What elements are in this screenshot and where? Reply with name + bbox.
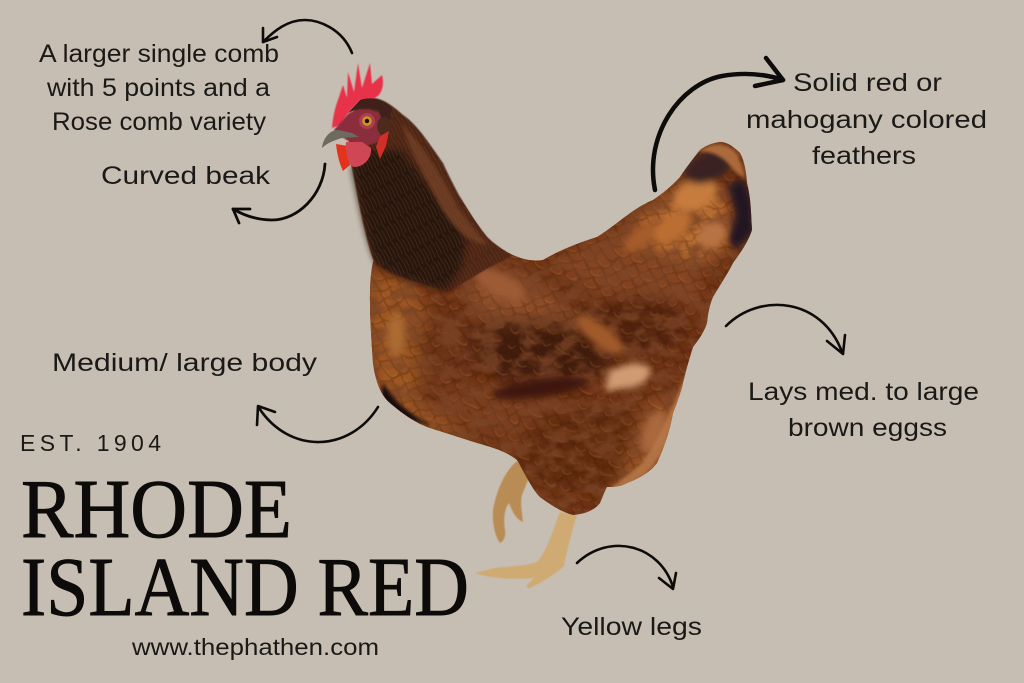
tail orange — [640, 180, 728, 262]
saddle dark — [592, 295, 688, 355]
label: eggs: Lays med. to large — [748, 378, 979, 406]
pink wattle — [346, 142, 371, 167]
dark tail top — [682, 151, 732, 188]
label: beak: Curved beak — [101, 162, 271, 190]
head — [322, 63, 392, 171]
standing leg and foot — [475, 512, 577, 588]
mottled shading — [370, 142, 752, 514]
label: comb: with 5 points and a — [46, 74, 270, 102]
label: feathers: mahogany colored — [746, 106, 987, 134]
belly edge glow — [610, 374, 685, 487]
breast highlight — [370, 269, 466, 436]
raised foot — [493, 461, 530, 543]
label: eggs — [748, 378, 979, 442]
neck hackles — [348, 98, 512, 292]
eye — [362, 116, 372, 126]
face — [334, 109, 381, 146]
dark throat — [352, 150, 465, 290]
label: feathers — [746, 69, 987, 170]
label: feathers: Solid red or — [793, 69, 942, 97]
arrow: feathers — [653, 58, 783, 190]
label: comb: A larger single comb — [39, 40, 279, 68]
breast shade — [410, 324, 474, 360]
feather texture — [370, 142, 752, 515]
eye ring — [359, 113, 375, 129]
base plumage — [370, 142, 752, 515]
neck — [348, 98, 512, 292]
body and tail plumage — [370, 142, 752, 515]
hackle texture — [350, 98, 512, 292]
wing shoulder — [462, 272, 600, 335]
back saddle — [545, 215, 700, 310]
breast underside shadow — [380, 382, 432, 426]
title: ISLAND RED — [21, 541, 469, 634]
belly outer glow — [610, 386, 680, 484]
title: RHODE — [21, 463, 292, 556]
label: comb: Rose comb variety — [52, 108, 267, 136]
wing lower — [435, 385, 590, 450]
comb — [332, 63, 383, 128]
dark tail edge — [728, 178, 754, 250]
pupil — [365, 119, 369, 123]
title — [21, 463, 469, 634]
red wattle — [336, 144, 350, 171]
large tail feathers — [387, 144, 754, 456]
label: comb — [39, 40, 279, 136]
ear lobe — [376, 131, 389, 159]
website: www.thephathen.com — [131, 634, 379, 660]
label: legs: Yellow legs — [561, 613, 702, 641]
chicken illustration — [322, 63, 760, 588]
label: body: Medium/ large body — [52, 349, 318, 377]
arrow: comb — [263, 20, 352, 53]
beak — [322, 130, 359, 148]
pale wing tip — [605, 364, 650, 392]
soft colour zones — [360, 180, 728, 492]
established date: EST. 1904 — [20, 430, 161, 456]
wing dark — [473, 303, 617, 387]
ear patch — [377, 117, 391, 135]
belly — [514, 405, 631, 494]
arrow: beak — [233, 164, 325, 223]
nape highlight — [402, 124, 488, 244]
arrow: body — [257, 406, 378, 442]
tail tip highlight — [698, 144, 746, 180]
label: eggs: brown eggss — [788, 414, 947, 442]
label: feathers: feathers — [812, 142, 916, 170]
arrow: legs — [577, 546, 676, 589]
crown — [348, 98, 392, 130]
arrow: eggs — [726, 305, 845, 354]
